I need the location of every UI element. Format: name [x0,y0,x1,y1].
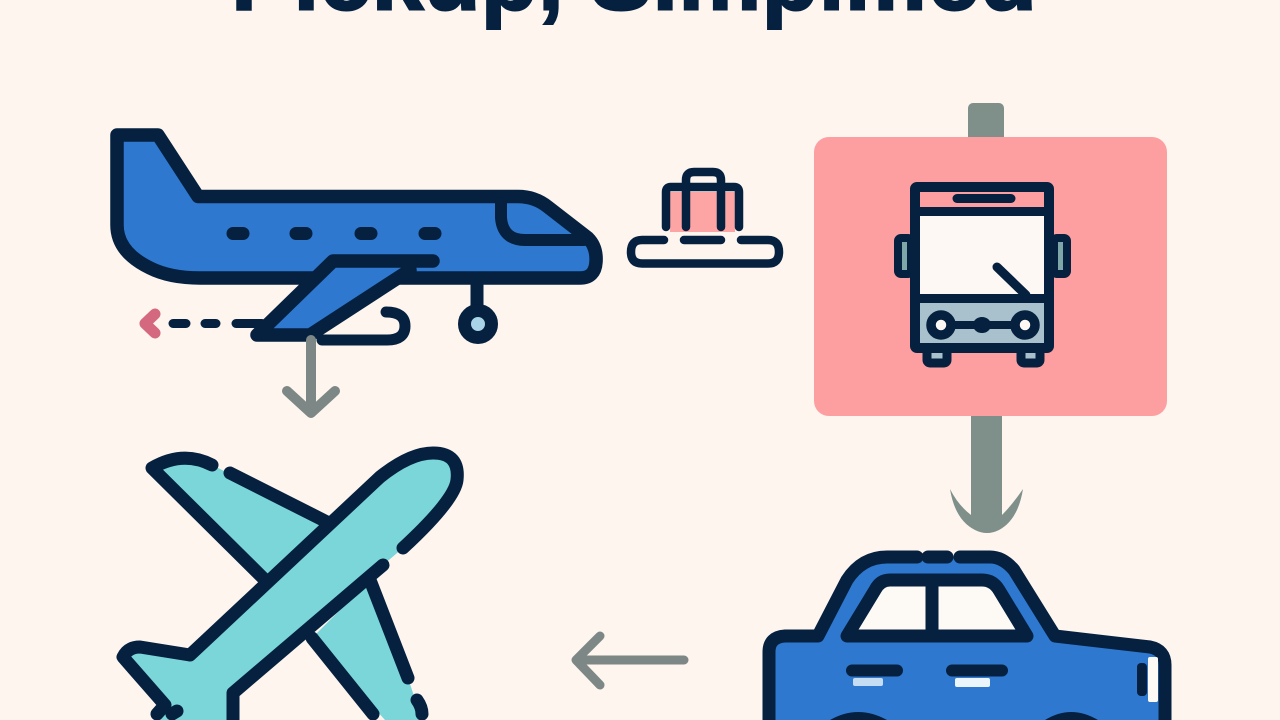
carousel belt [631,240,779,264]
headlight link [950,321,1015,329]
panel: bus stop sign [814,103,1167,533]
icon: baggage on carousel [631,172,779,264]
window pillar [926,580,938,636]
car outline [769,557,1165,665]
plane wing [257,261,433,335]
car body [769,557,1165,720]
centre hub [974,318,990,332]
landing gear [464,285,492,338]
sign post [968,103,1004,153]
car windows [847,580,1027,636]
plane fuselage [117,135,596,278]
baggage hook [322,312,405,340]
door handles [852,664,1002,676]
bus header [920,192,1044,207]
wiper [997,267,1026,295]
suitcase body [670,192,735,232]
arrow: sign down to car [950,410,1023,533]
tail light [1137,657,1158,702]
destination display [957,194,1011,203]
teal plane fills [123,453,457,720]
teal plane outline [123,453,457,714]
icon: teal plane top view [123,453,457,720]
suitcase outline and handle [666,172,739,227]
headlights [931,315,1035,335]
icon: blue car [769,557,1165,720]
bus body [915,187,1049,348]
arrow: car back to teal plane [576,636,684,685]
handle highlights [853,678,990,687]
car side edges [769,652,1165,720]
icon: bus front [898,187,1067,363]
cabin windows [233,227,435,240]
bus lower panel [920,303,1044,343]
dashed trail [173,319,262,328]
pink chevron [145,314,155,333]
wheels [830,712,1098,720]
icon: airliner side view with departure trail [117,135,596,340]
arrow: plane down to teal plane [287,340,335,413]
teal plane tail edge [226,693,240,720]
cockpit window [501,203,584,240]
bus wheels [927,347,1040,363]
bus dividers [920,212,1044,298]
sign board [814,137,1167,416]
bus mirrors [898,238,1067,274]
